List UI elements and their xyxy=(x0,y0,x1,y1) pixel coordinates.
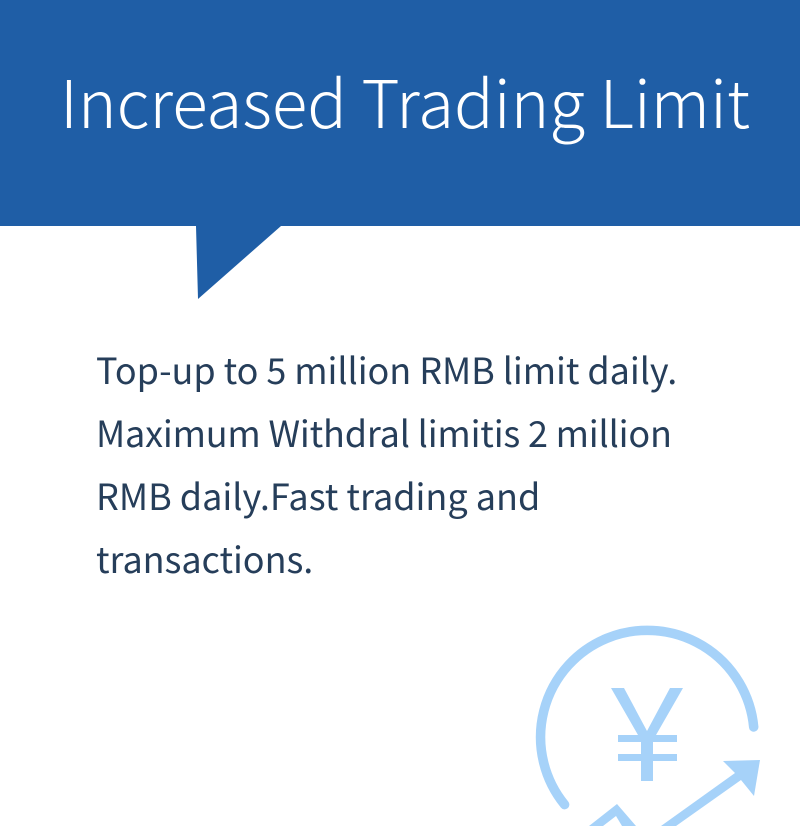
rising arrow xyxy=(589,760,760,826)
circular arc xyxy=(541,630,754,805)
body text: Top-up to 5 million RMB limit daily. xyxy=(96,343,677,395)
title: Increased Trading Limit xyxy=(60,52,750,147)
body text: transactions. xyxy=(96,532,313,584)
header speech banner xyxy=(0,0,800,299)
body text: RMB daily.Fast trading and xyxy=(96,469,540,521)
body text xyxy=(96,343,677,584)
yen symbol xyxy=(611,688,683,781)
body text: Maximum Withdral limitis 2 million xyxy=(96,406,672,458)
